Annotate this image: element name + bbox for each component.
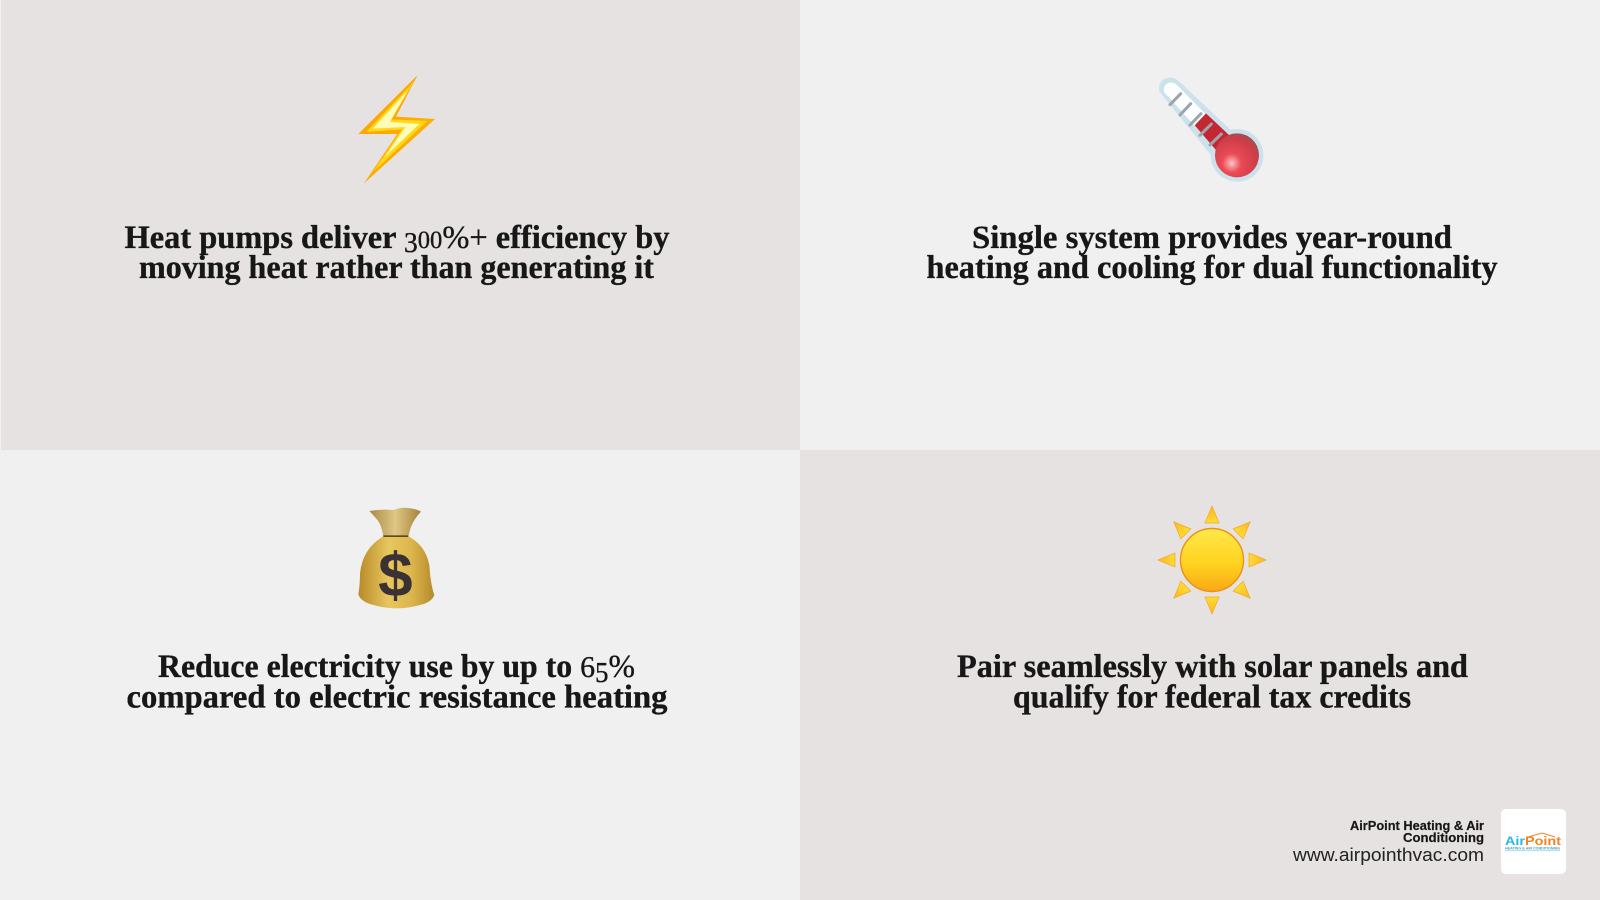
icon: sun [1158,506,1266,614]
heading: year-round: Single system provides year-round [972,220,1452,256]
heading: savings: % [609,649,635,685]
heading: efficiency: Heat pumps deliver [124,220,401,256]
brand footer [1292,809,1566,874]
heading: efficiency: moving heat rather than generating it [139,250,654,286]
heading: savings: Reduce electricity use by up to 6 [158,649,596,685]
logo: HEATING & AIR CONDITIONING [1505,846,1560,850]
panel: solar [800,450,1600,900]
heading: year-round: heating and cooling for dual functionality [926,250,1498,286]
logo [1501,809,1566,874]
logo: Point [1525,836,1561,848]
logo: Air [1505,836,1526,848]
icon: money bag: $ [378,541,413,610]
heading: efficiency [124,220,670,286]
icon: thermometer [1159,78,1263,182]
icon: money bag [358,508,434,610]
panel: efficiency [0,0,800,450]
icon: lightning bolt [358,75,435,183]
panel: year-round [800,0,1600,450]
panel: savings [0,450,800,900]
heading: solar [957,649,1468,716]
heading: savings: 5 [595,658,609,689]
heading: solar: Pair seamlessly with solar panels and [957,649,1468,685]
company name [1350,818,1484,845]
company name: AirPoint Heating & Air [1350,818,1484,833]
heading: efficiency: 00 [418,227,442,254]
heading: year-round [926,220,1498,286]
heading: savings [126,649,668,716]
heading: solar: qualify for federal tax credits [1013,680,1411,716]
website url: www.airpointhvac.com [1292,845,1484,865]
company name: Conditioning [1403,830,1484,845]
heading: efficiency: 3 [404,228,418,259]
heading: savings: compared to electric resistance heating [126,680,668,716]
heading: efficiency: %+ efficiency by [442,220,673,256]
